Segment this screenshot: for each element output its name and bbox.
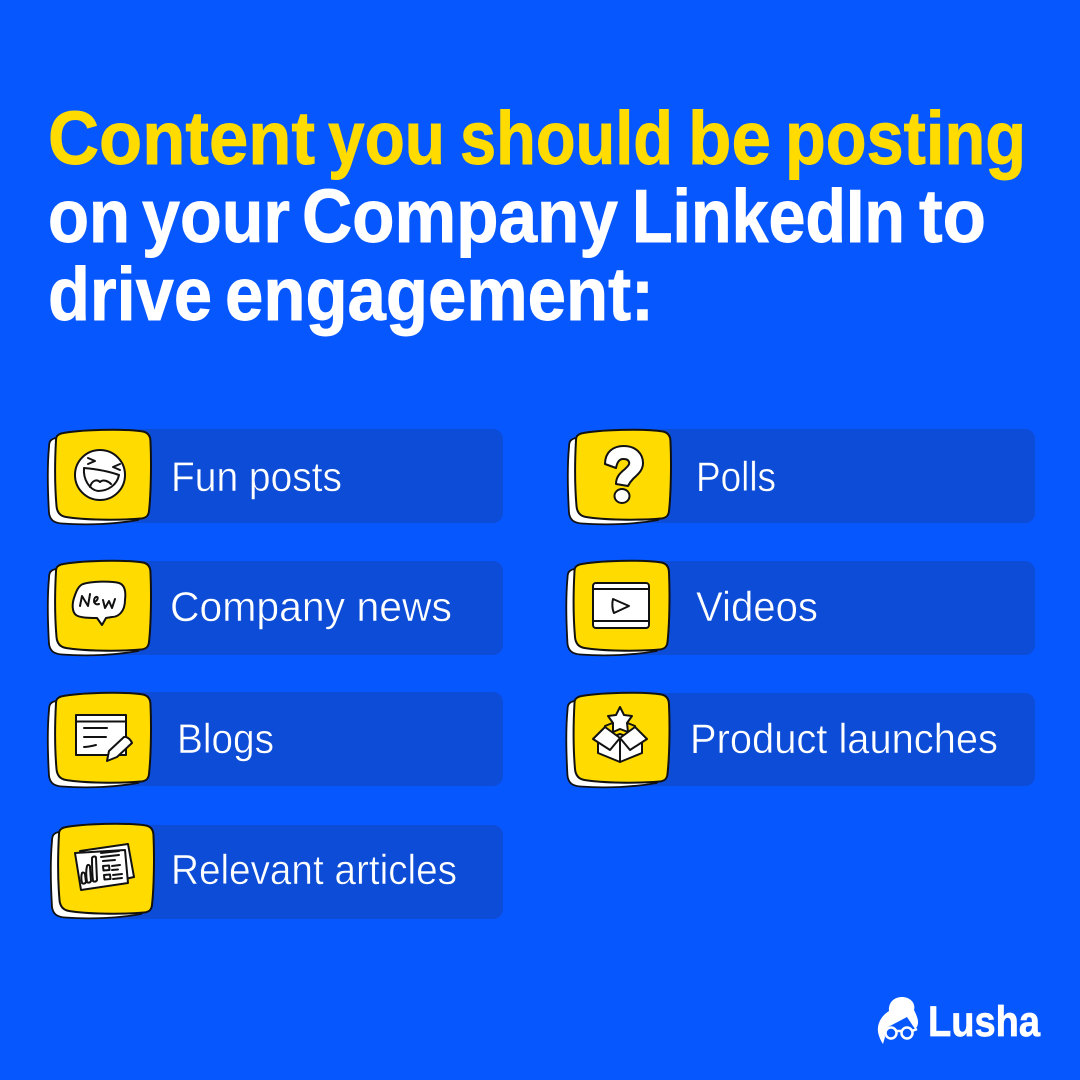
title: to [919, 174, 986, 258]
title: Company [302, 174, 618, 258]
icon: article sheets with chart [75, 844, 134, 890]
logo: Lusha [878, 997, 1041, 1046]
icon: head with glasses [878, 997, 918, 1044]
label: Videos [696, 583, 818, 630]
wordmark: Lusha [928, 998, 1041, 1046]
icon: open box with star [593, 707, 647, 762]
title: LinkedIn [632, 174, 905, 258]
title: engagement: [225, 252, 654, 336]
icon: video player [593, 583, 649, 628]
icon: question mark [605, 446, 643, 503]
label: Polls [696, 453, 776, 500]
icon: laughing face [75, 450, 125, 500]
item: Relevant articles [51, 824, 503, 919]
label: Product launches [690, 715, 998, 762]
item: Company news [48, 561, 503, 655]
title: be [688, 96, 771, 180]
title: drive [48, 252, 212, 336]
title: Content [48, 96, 315, 180]
title: should [460, 96, 673, 180]
label: Relevant articles [171, 846, 457, 893]
label: Fun posts [171, 453, 342, 500]
title: your [142, 174, 290, 258]
title [48, 96, 1026, 336]
item: Product launches [566, 693, 1035, 787]
label: Company news [170, 583, 452, 630]
title: posting [785, 96, 1026, 180]
title: on [48, 174, 130, 258]
item: Polls [568, 429, 1035, 524]
title: you [328, 96, 445, 180]
label: Blogs [177, 715, 274, 762]
item: Fun posts [48, 429, 503, 524]
item: Blogs [48, 692, 503, 787]
icon: new speech bubble [73, 582, 125, 625]
item: Videos [566, 561, 1035, 655]
icon: document with pencil [76, 715, 132, 761]
